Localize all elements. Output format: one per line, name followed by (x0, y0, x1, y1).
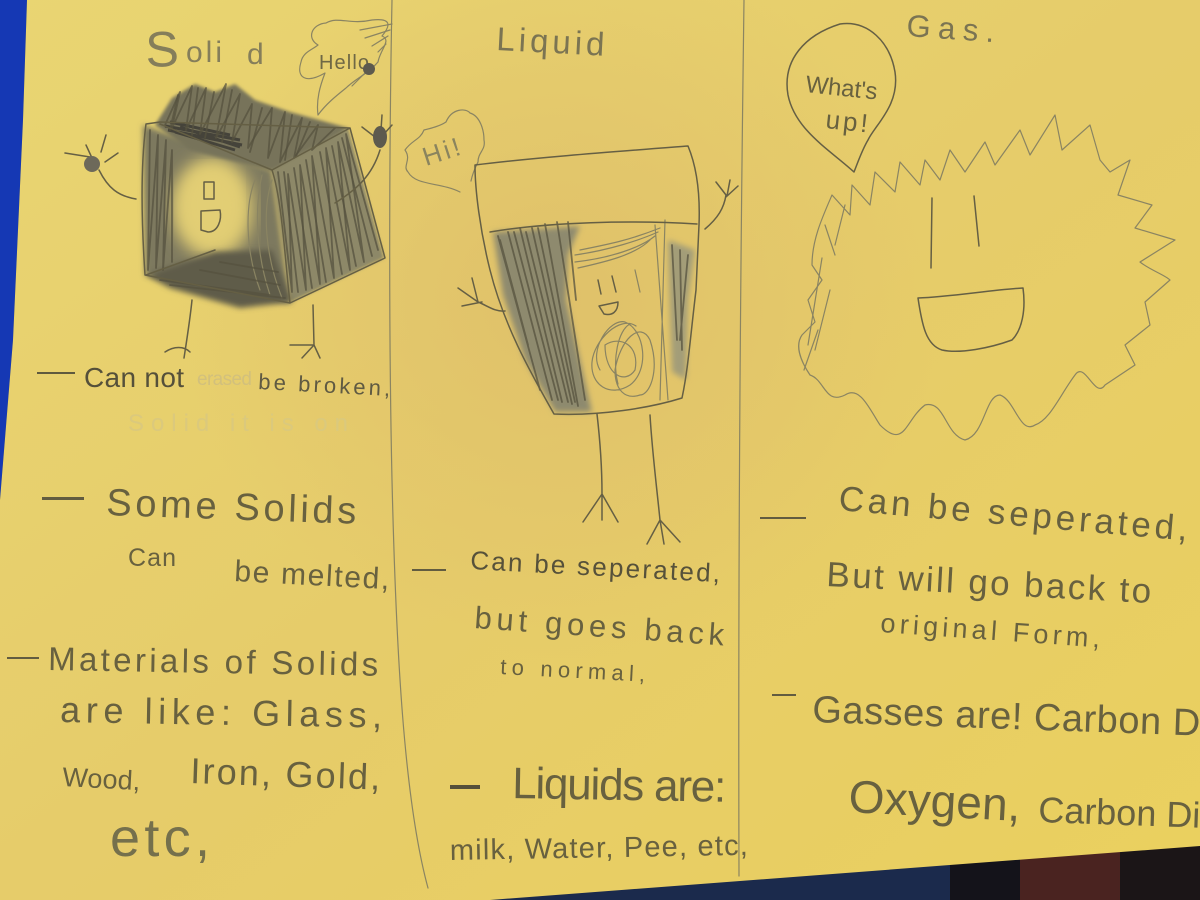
speech bubble: What's up (787, 24, 896, 172)
text: gasses are: Gasses are! Carbon D (812, 689, 1200, 745)
legs (583, 414, 680, 544)
heading: Solid: oli (186, 36, 225, 69)
text: gasses are: Carbon Di (1038, 789, 1200, 836)
text: materials of solids: Wood, (62, 762, 141, 796)
text: gasses are: Oxygen, (847, 770, 1022, 831)
belly scribble (592, 322, 654, 396)
blue paper edge (0, 0, 27, 500)
cup outline (475, 146, 699, 414)
panel: liquid (405, 20, 748, 867)
heading: Liquid: Liquid (496, 20, 605, 63)
icon: solid cube character (65, 63, 392, 358)
text: cannot be broken: Can not (84, 362, 184, 393)
eyes (931, 196, 979, 268)
text: liquids are: milk, Water, Pee, etc, (450, 830, 748, 867)
panel: solid (7, 20, 392, 868)
text: materials of solids (7, 640, 383, 868)
text: can be seperated: to normal, (500, 654, 646, 687)
heading: Gas: Gas. (906, 8, 996, 49)
column divider: liquid and gas (739, 0, 744, 876)
mouth (918, 288, 1024, 351)
text: some solids can be melted: Can (128, 544, 176, 572)
legs (165, 300, 320, 358)
speech bubble: What's up: up! (824, 104, 869, 138)
face (598, 276, 618, 314)
panel: gas (760, 8, 1200, 836)
speech bubble: Hello (300, 20, 392, 115)
face (201, 182, 220, 232)
speech bubble: Hello: Hello (319, 52, 369, 74)
text: can be seperated: But will go back to (826, 555, 1152, 611)
cloud outline (799, 115, 1175, 440)
text: can be seperated: original Form, (880, 608, 1101, 653)
liquid hatch right (668, 240, 695, 380)
speech bubble: Hi (405, 110, 484, 192)
text: cannot be broken: erased (197, 369, 252, 390)
cube right face shading (272, 128, 384, 302)
text: liquids are (450, 759, 748, 867)
text: materials of solids: are like: Glass, (60, 689, 383, 736)
cube top shading (155, 84, 348, 172)
text: can be seperated: Can be seperated, (837, 479, 1189, 548)
heading: Solid: d (247, 38, 264, 71)
text: cannot be broken (37, 362, 391, 437)
text: can be seperated (760, 479, 1189, 653)
heading: Solid: S (144, 21, 180, 78)
text: cannot be broken: be broken, (258, 369, 391, 401)
cube bottom shading (146, 250, 292, 308)
text: some solids can be melted: be melted, (234, 555, 390, 596)
text: materials of solids: Iron, Gold, (190, 750, 381, 798)
left arm (65, 135, 136, 199)
text: materials of solids: Materials of Solids (48, 640, 378, 683)
text: gasses are (772, 689, 1200, 836)
text: cannot be broken: Solid it is on (128, 410, 348, 437)
text: can be seperated (412, 545, 726, 687)
cube face highlight (173, 158, 253, 258)
arms (458, 180, 738, 311)
speech bubble: What's up: What's (804, 71, 879, 105)
text: materials of solids: etc, (110, 808, 210, 868)
text: can be seperated: Can be seperated, (470, 545, 721, 588)
text: some solids can be melted: Some Solids (106, 482, 357, 533)
text: liquids are: Liquids are: (512, 759, 727, 812)
icon: gas cloud character (799, 115, 1175, 440)
icon: liquid cup character (458, 146, 738, 544)
text: can be seperated: but goes back (474, 600, 726, 652)
right arm (335, 115, 392, 203)
column divider: solid and liquid (390, 0, 428, 888)
liquid hatch left (493, 226, 592, 412)
heading: Solid (144, 21, 264, 78)
text: some solids can be melted (42, 482, 390, 596)
cube left face shading (143, 125, 290, 303)
speech bubble: Hi: Hi! (419, 131, 464, 172)
